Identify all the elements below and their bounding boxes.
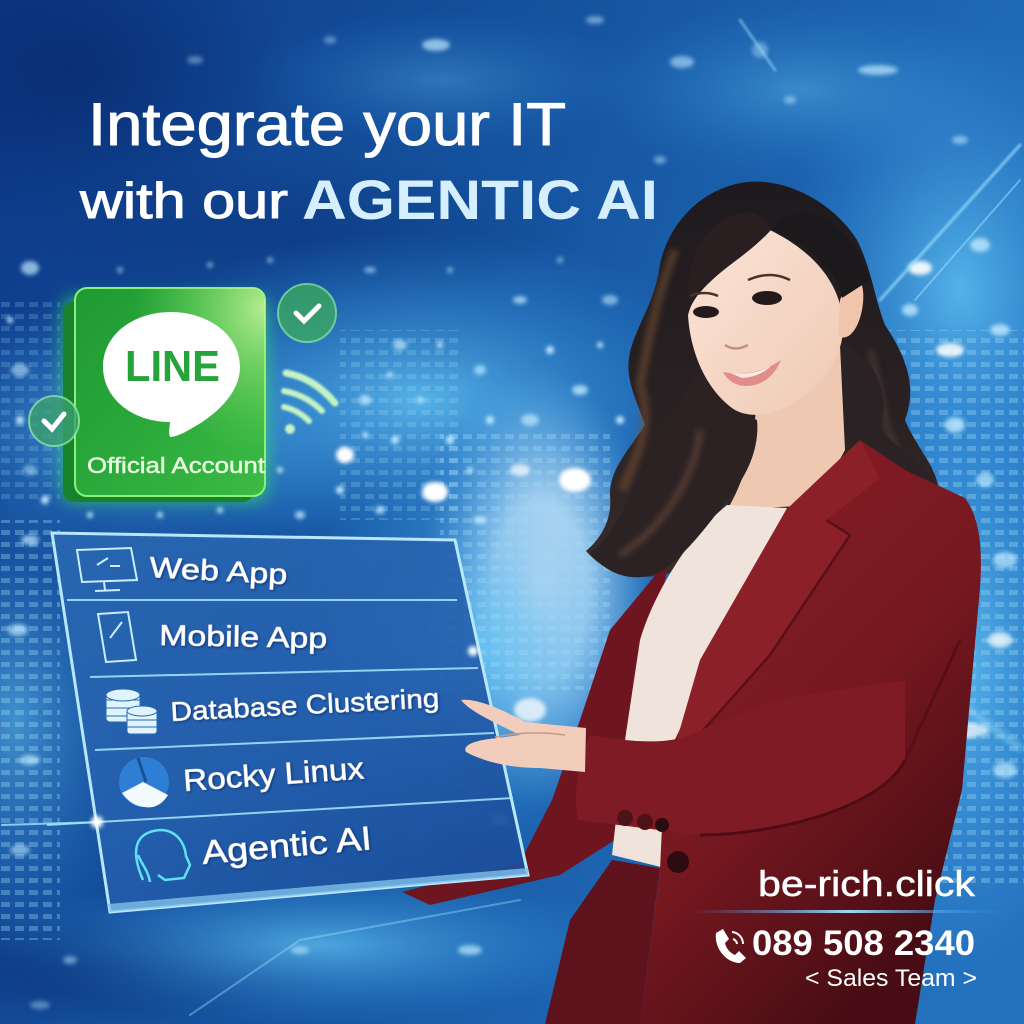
website: be-rich.click [758,863,976,904]
icon: phone [98,612,136,662]
woman: hair front falling over shoulders [590,340,938,577]
smile [723,360,781,386]
LINE speech bubble [103,312,240,437]
Official Account label: Official Account [87,453,265,478]
icon: Rocky logo [119,757,169,807]
woman: pointing hand [461,700,586,772]
hair fringe [688,212,771,300]
woman: hair back [586,182,938,577]
LINE Official Account card [62,288,268,502]
sales team label: < Sales Team > [805,965,977,992]
label: Mobile App [159,620,327,655]
panel sparkles [91,646,478,828]
title line 2: with our [79,173,288,229]
icon: check badge top right [278,284,336,342]
title [79,91,658,231]
icon: check badge left [29,396,79,446]
cuff buttons [617,810,689,873]
label: Agentic AI [200,819,373,871]
contact block [690,863,1010,992]
woman: blazer main [545,440,981,1024]
label: Rocky Linux [182,750,366,798]
icon: AI head [136,830,190,882]
woman: blazer left side [402,560,668,905]
card face [75,288,265,496]
nose [725,345,748,348]
row: Mobile App [98,612,327,662]
row: Rocky Linux [119,750,366,807]
title highlight: AGENTIC AI: AGENTIC AI [302,168,658,231]
woman: forearm sleeve [576,680,905,873]
title line 1: Integrate your IT [88,91,566,158]
lower left blazer panel [545,860,660,1024]
phone number: 089 508 2340 [752,924,975,963]
icon: database stack [106,689,157,734]
woman: face [688,212,870,415]
ear [838,279,863,338]
floating service panel [47,533,528,912]
card highlight [75,288,265,496]
icon: phone handset [716,929,746,963]
woman: neck and chest [727,345,845,510]
divider glow [690,910,1010,913]
lapel [668,440,880,770]
row: Web App [77,548,288,591]
woman: blouse [612,505,787,868]
icon: wireless signal arcs [284,373,335,434]
icon: monitor [77,548,137,591]
row: Agentic AI [136,819,373,882]
LINE wordmark: LINE [125,342,220,391]
eyes [693,306,719,318]
card back layer [63,302,253,502]
label: Web App [149,552,288,591]
label: Database Clustering [170,683,440,727]
row: Database Clustering [106,683,440,734]
